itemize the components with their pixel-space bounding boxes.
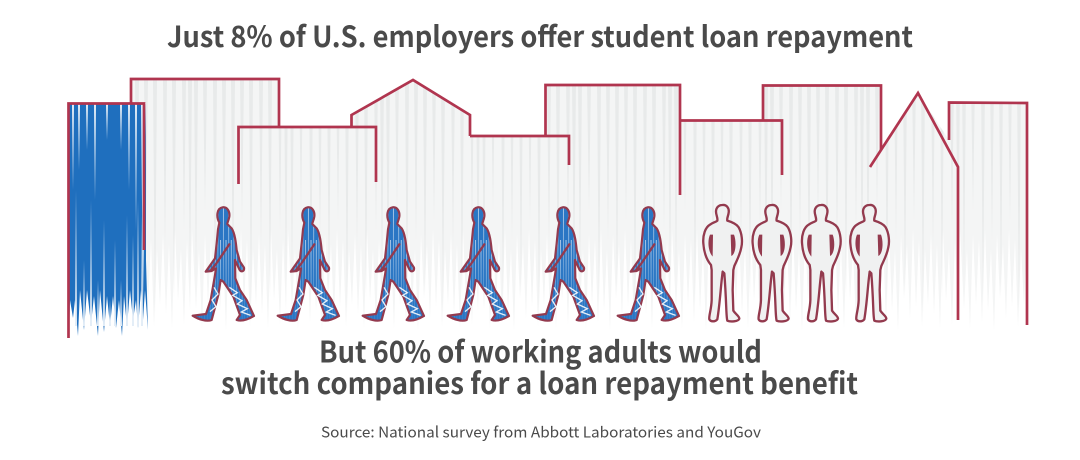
subheading: switch companies for a loan repayment benefit	[221, 361, 858, 403]
skyline illustration	[68, 79, 1027, 338]
walking people (blue, 6 of 10)	[193, 207, 679, 321]
subheading: But 60% of working adults would	[319, 330, 762, 372]
grey hatched buildings	[131, 79, 1027, 335]
building outlines	[68, 79, 1027, 338]
blue hatched building	[69, 104, 148, 338]
standing people (grey, 4 of 10)	[703, 205, 889, 321]
title: Just 8% of U.S. employers offer student loan repayment	[167, 14, 913, 56]
subheading	[221, 330, 858, 403]
source note: Source: National survey from Abbott Laboratories and YouGov	[321, 422, 761, 442]
